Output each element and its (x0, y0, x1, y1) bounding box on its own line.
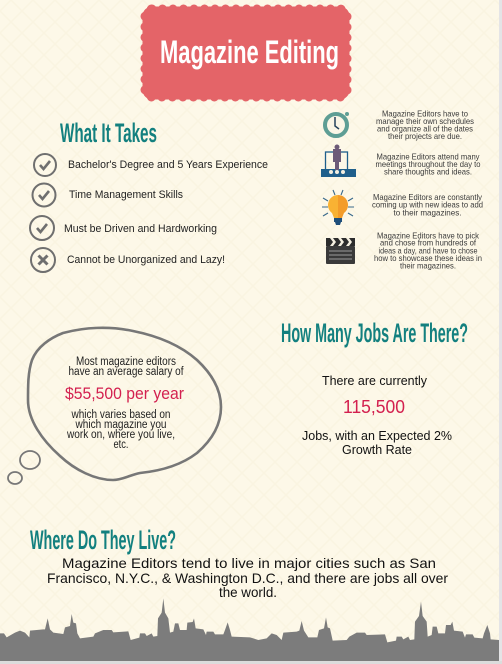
duty text 2: meetings throughout the day to (376, 159, 481, 169)
salary intro: Most magazine editors (76, 356, 176, 368)
salary note (66, 409, 175, 451)
jobs growth: Jobs, with an Expected 2% (302, 428, 452, 443)
text block: locations: Francisco, N.Y.C., & Washington D.C., and there are jobs all over (47, 570, 448, 586)
duty text 1 (376, 108, 474, 141)
heading: where do they live: Where Do They Live? (30, 525, 176, 555)
jobs growth (302, 428, 452, 457)
duty text 3: to their magazines. (394, 207, 462, 217)
icon: check 2 (32, 184, 56, 206)
text block: locations: the world. (219, 584, 277, 600)
salary note: which varies based on (71, 409, 170, 421)
panel: requirements checklist (30, 154, 268, 272)
salary note: work on, where you live, (66, 429, 175, 441)
jobs intro: There are currently (322, 373, 427, 388)
duty text 1: Magazine Editors have to (382, 108, 468, 118)
salary intro: have an average salary of (68, 366, 184, 378)
duty text 2: share thoughts and ideas. (384, 166, 472, 176)
requirement 1: Bachelor's Degree and 5 Years Experience (68, 159, 268, 171)
duty text 2 (376, 152, 481, 176)
requirement 3: Must be Driven and Hardworking (64, 223, 217, 235)
requirement 2: Time Management Skills (69, 189, 183, 201)
jobs figure: 115,500 (343, 397, 405, 417)
salary note: etc. (114, 439, 128, 451)
thought bubble outline (8, 328, 221, 484)
duty text 4: their magazines. (400, 260, 456, 270)
duty text 4: ideas a day, and have to chose (378, 245, 478, 255)
heading: what it takes: What It Takes (60, 118, 157, 148)
icon: check 3 (30, 216, 54, 240)
salary figure: $55,500 per year (65, 384, 184, 403)
icon: cross (31, 248, 55, 272)
duty text 2: Magazine Editors attend many (376, 152, 480, 162)
salary note: which magazine you (75, 419, 166, 431)
title banner: Magazine Editing (160, 34, 339, 70)
icon: stopwatch (325, 112, 349, 136)
duty text 4: Magazine Editors have to pick (377, 230, 480, 240)
duty text 1: their projects are due. (388, 131, 462, 141)
duty text 1: manage their own schedules (376, 116, 474, 126)
duty text 3: Magazine Editors are constantly (373, 192, 483, 202)
duty text 3 (372, 192, 483, 217)
icon: clapperboard (326, 238, 355, 264)
requirement 4: Cannot be Unorganized and Lazy! (67, 254, 225, 266)
duty text 4 (374, 230, 482, 270)
icon: check 1 (34, 154, 56, 176)
icon: light bulb (322, 190, 354, 225)
text block: locations: Magazine Editors tend to live in major cities such as San (62, 555, 436, 571)
panel: job statistics (302, 373, 452, 457)
title banner (145, 9, 347, 97)
panel: daily duties (321, 108, 483, 270)
jobs growth: Growth Rate (342, 442, 412, 457)
text block: locations (47, 555, 448, 600)
duty text 3: coming up with new ideas to add (372, 200, 483, 210)
icon: meeting presenter (321, 144, 356, 177)
panel: salary thought bubble (8, 328, 221, 484)
salary intro (68, 356, 184, 378)
duty text 4: how to showcase these ideas in (374, 253, 482, 263)
skyline silhouette (0, 598, 499, 661)
duty text 4: and chose from hundreds of (380, 238, 477, 248)
duty text 1: and organize all of the dates (377, 124, 473, 134)
